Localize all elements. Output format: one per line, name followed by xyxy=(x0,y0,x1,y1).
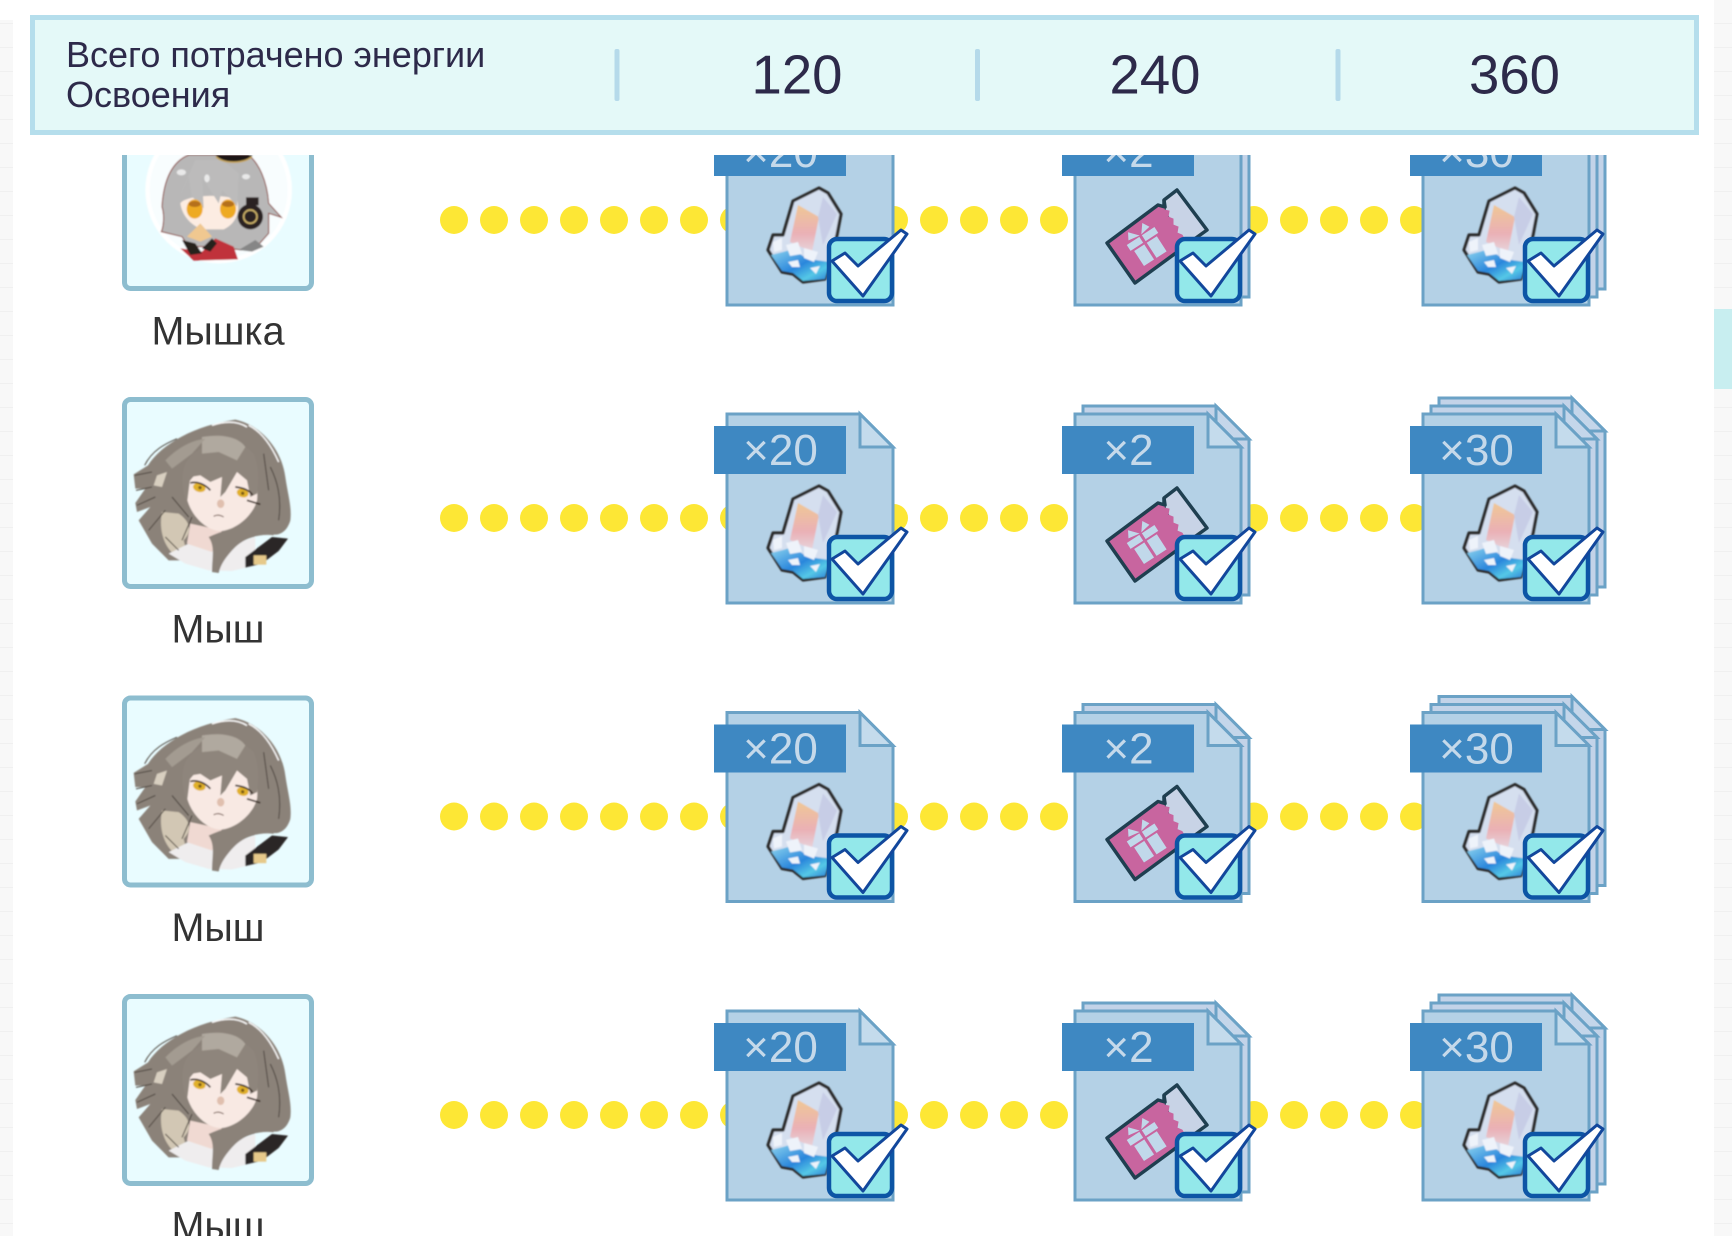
avatar: girl xyxy=(124,996,312,1184)
reward 3 xyxy=(1410,995,1605,1200)
reward 3 xyxy=(1410,398,1605,603)
left page strip xyxy=(0,20,13,1236)
separator 3 xyxy=(1336,49,1340,101)
reward 3: ×30 xyxy=(1439,128,1514,177)
reward 1 xyxy=(714,1011,907,1200)
name: Мыш xyxy=(172,608,264,652)
dotted progress line xyxy=(440,504,1428,532)
dotted progress line xyxy=(440,802,1428,830)
dotted progress line xyxy=(440,206,1428,234)
reward 1: ×20 xyxy=(743,1023,818,1072)
reward 2 xyxy=(1062,155,1257,306)
reward 2: ×2 xyxy=(1103,128,1154,177)
reward 2: ×2 xyxy=(1103,724,1154,774)
avatar: chibi xyxy=(122,155,314,291)
reward 3 xyxy=(1410,155,1606,306)
reward 1 xyxy=(714,414,907,603)
header label: Освоения xyxy=(66,74,230,115)
reward 2: ×2 xyxy=(1103,426,1154,475)
reward 2 xyxy=(1062,406,1255,603)
reward 1: ×20 xyxy=(743,724,818,774)
avatar: girl xyxy=(124,698,312,885)
reward 1 xyxy=(714,155,909,306)
name: Мышка xyxy=(151,310,285,354)
reward 3: ×30 xyxy=(1439,426,1514,475)
separator 1 xyxy=(614,49,620,101)
reward 1 xyxy=(714,712,907,902)
value 240: 240 xyxy=(1110,44,1200,106)
reward 1: ×20 xyxy=(743,426,818,475)
reward 2 xyxy=(1062,704,1255,902)
avatar: girl xyxy=(124,400,312,586)
reward 2 xyxy=(1062,1003,1255,1200)
separator 2 xyxy=(975,49,980,101)
row 1: Мышка xyxy=(122,155,1606,345)
row 4: Мыш xyxy=(124,995,1605,1236)
header panel: total energy spent xyxy=(32,18,1696,132)
name: Мыш xyxy=(172,906,264,950)
dotted progress line xyxy=(440,1101,1428,1129)
reward 3 xyxy=(1410,696,1605,902)
reward 2: ×2 xyxy=(1103,1023,1154,1072)
header background xyxy=(32,18,1696,132)
right strip highlight xyxy=(1714,309,1732,389)
row 3: Мыш xyxy=(124,696,1605,950)
value 360: 360 xyxy=(1469,44,1560,106)
reward 3: ×30 xyxy=(1439,724,1514,774)
header label: Всего потрачено энергии xyxy=(66,34,485,75)
reward rows, clipped beneath header xyxy=(124,100,1605,1236)
right page strip xyxy=(1714,0,1732,1236)
row 2: Мыш xyxy=(124,398,1605,652)
reward 3: ×30 xyxy=(1439,1023,1514,1072)
reward 1: ×20 xyxy=(743,128,818,177)
value 120: 120 xyxy=(752,44,842,106)
